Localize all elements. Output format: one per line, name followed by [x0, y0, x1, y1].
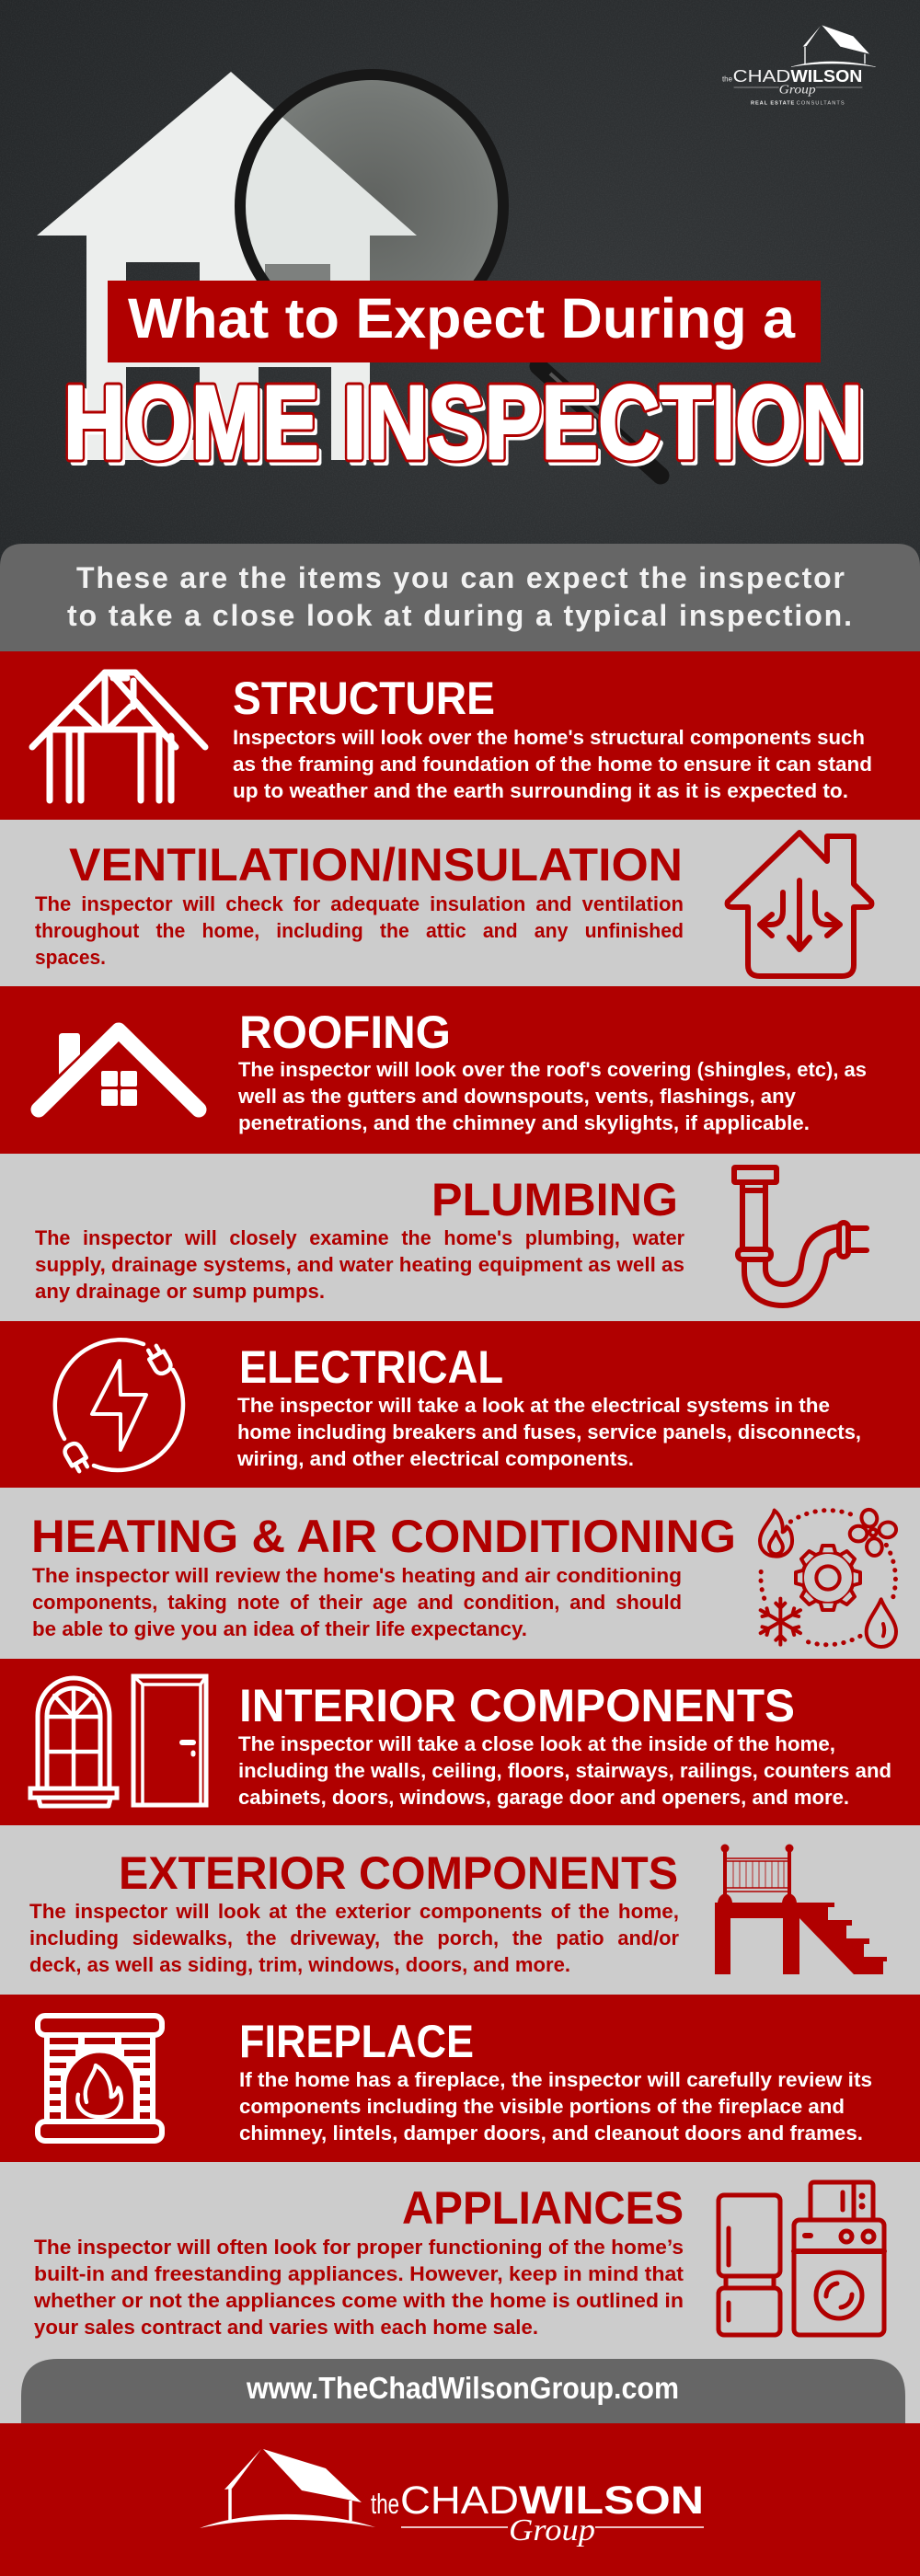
heading: ROOFING — [239, 1006, 451, 1058]
body text: built-in and freestanding appliances. However, keep in mind that — [34, 2262, 684, 2285]
paper house — [37, 72, 417, 460]
body text: throughout the home, including the attic and any unfinished — [35, 919, 684, 942]
body text: wiring, and other electrical components. — [236, 1447, 634, 1470]
body text: any drainage or sump pumps. — [35, 1280, 325, 1303]
footer logo: the — [371, 2488, 399, 2520]
body text: If the home has a fireplace, the inspector will carefully review its — [239, 2068, 872, 2091]
footer logo — [200, 2449, 704, 2547]
fan — [849, 1508, 897, 1557]
body text — [237, 1058, 867, 1134]
top-right logo: CONSULTANTS — [797, 100, 845, 106]
body text: well as the gutters and downspouts, vents, flashings, any — [237, 1085, 796, 1108]
body text: including the walls, ceiling, floors, stairways, railings, counters and — [238, 1759, 891, 1782]
body text — [233, 726, 872, 802]
panel: fireplace — [0, 1995, 920, 2162]
top-right logo — [722, 25, 876, 106]
body text: supply, drainage systems, and water heating equipment as well as — [35, 1253, 684, 1276]
body text: components, taking note of their age and condition, and should — [32, 1591, 682, 1614]
water drop — [867, 1599, 896, 1647]
footer logo: CHAD — [400, 2478, 519, 2523]
heading: STRUCTURE — [233, 673, 495, 724]
body text: home including breakers and fuses, service panels, disconnects, — [237, 1420, 861, 1443]
heading: PLUMBING — [431, 1174, 678, 1225]
body text — [236, 1394, 861, 1470]
panel: exterior components — [0, 1825, 920, 1995]
body text: spaces. — [35, 946, 106, 969]
body text — [29, 1900, 679, 1976]
icon: lightning bolt with plugs — [55, 1340, 183, 1473]
intro banner — [0, 544, 920, 651]
body text: The inspector will check for adequate insulation and ventilation — [35, 892, 684, 915]
body text: The inspector will look at the exterior components of the home, — [29, 1900, 679, 1923]
panel: heating and air conditioning — [0, 1488, 920, 1659]
body text: components including the visible portions of the fireplace and — [239, 2095, 845, 2118]
body text: your sales contract and varies with each home sale. — [34, 2316, 538, 2339]
icon: roof truss framing — [32, 673, 205, 800]
footer — [0, 2423, 920, 2576]
snowflake — [758, 1599, 802, 1645]
panel: ventilation/insulation — [0, 820, 920, 986]
body text: The inspector will take a close look at the inside of the home, — [238, 1732, 835, 1755]
hero photo: house and magnifying glass — [0, 0, 920, 567]
icon: roof with window — [39, 1030, 199, 1110]
body text: including sidewalks, the driveway, the porch, the patio and/or — [29, 1926, 679, 1949]
icon: fireplace with flame — [38, 2016, 162, 2141]
body text — [33, 2236, 684, 2339]
body text — [35, 1226, 684, 1303]
body text: The inspector will review the home's heating and air conditioning — [32, 1564, 682, 1587]
window — [38, 1678, 109, 1788]
heading: ELECTRICAL — [239, 1341, 503, 1393]
top-right logo: the — [722, 75, 733, 84]
icon: deck with stairs — [715, 1844, 887, 1974]
body text — [32, 1564, 682, 1640]
body text: The inspector will look over the roof's covering (shingles, etc), as — [238, 1058, 867, 1081]
intro banner: These are the items you can expect the inspector — [76, 561, 845, 594]
heading: APPLIANCES — [402, 2182, 684, 2234]
icon: arched window and door — [30, 1676, 206, 1806]
panel: plumbing — [0, 1154, 920, 1321]
title — [63, 281, 867, 485]
heading: HEATING & AIR CONDITIONING — [31, 1511, 736, 1562]
body text: Inspectors will look over the home's structural components such — [233, 726, 865, 749]
icon: fridge washer microwave — [719, 2182, 884, 2335]
body text: as the framing and foundation of the home to ensure it can stand — [233, 753, 872, 776]
panel: appliances — [0, 2162, 920, 2423]
footer logo: WILSON — [519, 2478, 704, 2523]
title line one on red band — [108, 281, 821, 362]
body text — [239, 2068, 872, 2145]
heading: EXTERIOR COMPONENTS — [119, 1847, 678, 1899]
body text: be able to give you an idea of their life expectancy. — [32, 1617, 527, 1640]
body text — [35, 892, 684, 969]
panel: electrical — [0, 1321, 920, 1488]
body text: The inspector will take a look at the electrical systems in the — [237, 1394, 830, 1417]
body text — [238, 1732, 891, 1809]
flame — [760, 1511, 792, 1557]
website banner — [21, 2359, 905, 2423]
magnifier lens — [235, 69, 509, 281]
body text: The inspector will closely examine the home's plumbing, water — [35, 1226, 684, 1249]
body text: chimney, lintels, damper doors, and cleanout doors and frames. — [239, 2122, 863, 2145]
heading: FIREPLACE — [239, 2016, 474, 2067]
top-right logo: CHAD — [733, 66, 790, 86]
body text: deck, as well as siding, trim, windows, doors, and more. — [29, 1953, 570, 1976]
top-right logo: WILSON — [790, 66, 862, 86]
panel: structure — [0, 651, 920, 820]
footer logo: Group — [509, 2513, 595, 2547]
icon: hvac flame fan gear snowflake drop — [758, 1508, 897, 1647]
gear — [796, 1546, 860, 1610]
body text: whether or not the appliances come with the home is outlined in — [33, 2289, 684, 2312]
door — [133, 1676, 206, 1805]
website banner: www.TheChadWilsonGroup.com — [246, 2371, 679, 2405]
icon: house with airflow arrows — [728, 833, 871, 976]
body text: penetrations, and the chimney and skylights, if applicable. — [238, 1111, 810, 1134]
icon: drain pipe — [734, 1167, 867, 1305]
panel: roofing — [0, 986, 920, 1154]
heading: INTERIOR COMPONENTS — [239, 1680, 795, 1731]
panel: interior components — [0, 1659, 920, 1825]
title line one on red band: What to Expect During a — [128, 287, 796, 350]
body text: cabinets, doors, windows, garage door and openers, and more. — [238, 1786, 849, 1809]
body text: up to weather and the earth surrounding it as it is expected to. — [233, 779, 848, 802]
top-right logo: Group — [779, 83, 816, 97]
dotted ring — [761, 1511, 895, 1645]
top-right logo: REAL ESTATE — [751, 100, 795, 106]
intro banner: to take a close look at during a typical inspection. — [67, 599, 852, 632]
body text: The inspector will often look for proper functioning of the home’s — [34, 2236, 684, 2259]
heading: VENTILATION/INSULATION — [69, 839, 683, 891]
magnifier handle — [538, 366, 661, 476]
